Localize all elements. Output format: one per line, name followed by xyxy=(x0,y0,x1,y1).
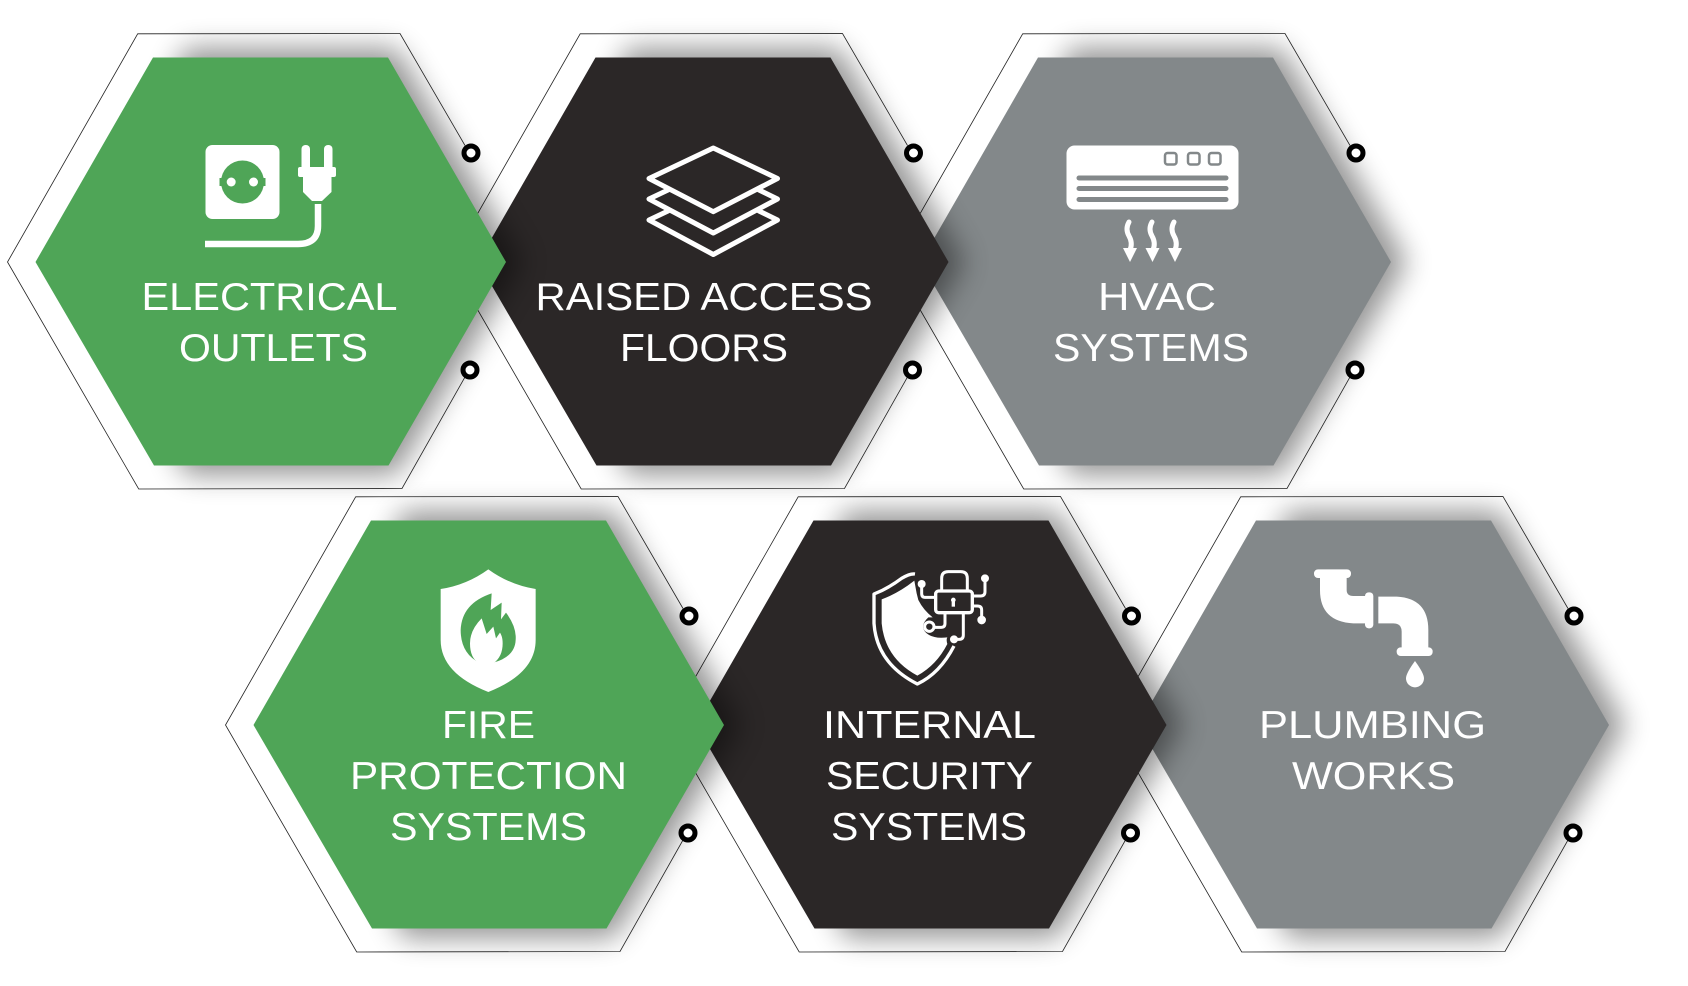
hexagon: fire protection systems xyxy=(226,496,740,952)
icon: fire shield xyxy=(441,569,536,692)
label: internal security systems: SECURITY xyxy=(826,755,1033,798)
label: plumbing works: PLUMBING xyxy=(1259,704,1486,747)
hexagon: plumbing works xyxy=(1110,496,1625,952)
icon: shield with padlock circuit xyxy=(874,572,989,684)
label: internal security systems: INTERNAL xyxy=(823,704,1036,747)
label: raised access floors xyxy=(536,276,872,370)
icon: dripping pipe xyxy=(1314,569,1433,687)
label: HVAC systems: HVAC xyxy=(1098,276,1216,319)
label: electrical outlets: OUTLETS xyxy=(179,327,368,370)
label: plumbing works: WORKS xyxy=(1292,755,1455,798)
label: plumbing works xyxy=(1259,704,1486,798)
label: electrical outlets xyxy=(142,276,398,370)
hexagon: HVAC systems xyxy=(892,34,1407,489)
label: fire protection systems: FIRE xyxy=(442,704,535,747)
hexagon: internal security systems xyxy=(668,496,1182,952)
hexagon: raised access floors xyxy=(450,34,964,489)
label: raised access floors: FLOORS xyxy=(620,327,788,370)
label: internal security systems: SYSTEMS xyxy=(831,806,1027,849)
label: HVAC systems: SYSTEMS xyxy=(1053,327,1249,370)
label: HVAC systems xyxy=(1053,276,1249,370)
icon: stacked layers xyxy=(649,148,778,254)
label: fire protection systems: SYSTEMS xyxy=(390,806,587,849)
label: fire protection systems: PROTECTION xyxy=(350,755,627,798)
label: internal security systems xyxy=(823,704,1036,849)
label: electrical outlets: ELECTRICAL xyxy=(142,276,398,319)
hexagon: electrical outlets xyxy=(8,34,522,489)
icon: socket and plug xyxy=(205,145,336,244)
label: raised access floors: RAISED ACCESS xyxy=(536,276,872,319)
icon: air conditioner xyxy=(1066,146,1238,262)
label: fire protection systems xyxy=(350,704,627,849)
